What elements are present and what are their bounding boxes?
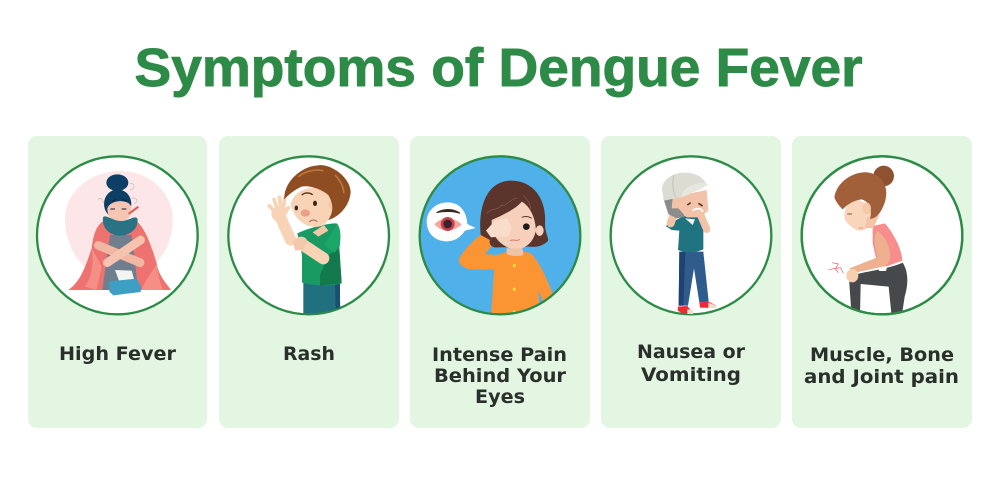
label: muscle, bone and joint pain: and Joint pain (804, 366, 959, 388)
panel: intense pain behind your eyes (410, 136, 590, 428)
icon: child covering a painful eye (420, 156, 580, 317)
icon: woman holding a painful knee (802, 156, 962, 317)
label: intense pain behind your eyes: Intense Pain (432, 344, 567, 366)
panel: nausea or vomiting (601, 136, 781, 428)
title: Symptoms of Dengue Fever (134, 38, 862, 98)
label: rash: Rash (283, 343, 335, 365)
icon: boy with rash on his arm (228, 156, 389, 317)
panel: rash (219, 136, 399, 428)
panel: muscle, bone and joint pain (792, 136, 972, 428)
label: high fever: High Fever (59, 343, 177, 365)
label: intense pain behind your eyes: Behind Your (434, 365, 567, 387)
icon: man in a cap feeling nauseous (611, 156, 771, 314)
icon: woman with fever wrapped in a blanket (37, 156, 198, 314)
label: muscle, bone and joint pain: Muscle, Bone (810, 344, 954, 366)
label: intense pain behind your eyes: Eyes (475, 386, 525, 408)
label: nausea or vomiting: Nausea or (637, 341, 746, 363)
panel: high fever (28, 136, 207, 428)
label: nausea or vomiting: Vomiting (641, 364, 741, 386)
